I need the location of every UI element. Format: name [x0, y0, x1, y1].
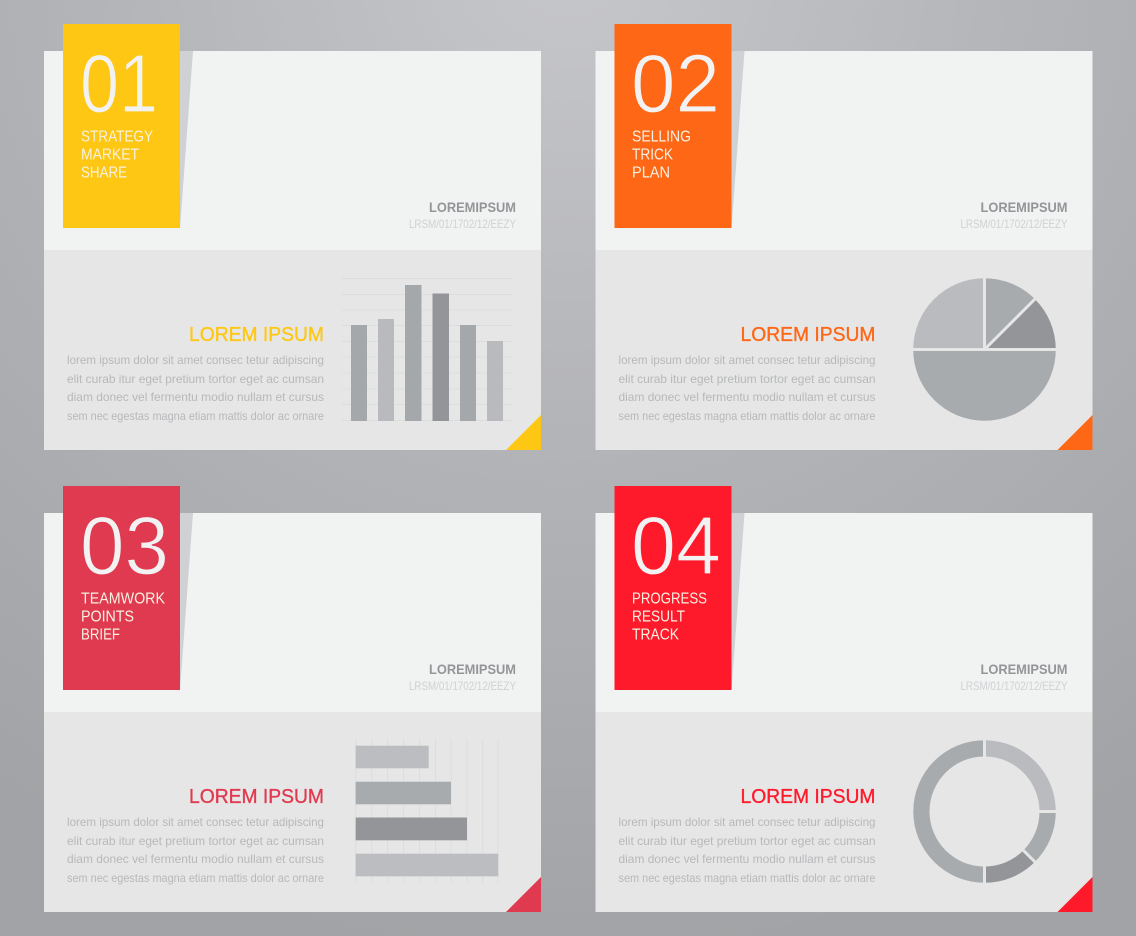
- body text: [67, 353, 324, 423]
- panel: 03 teamwork points brief: [44, 486, 541, 912]
- label shadow: [732, 513, 744, 690]
- body text: elit curab itur eget pretium tortor eget ac cumsan: [618, 834, 876, 848]
- body text: elit curab itur eget pretium tortor eget ac cumsan: [67, 834, 324, 848]
- header name: LOREMIPSUM: [980, 661, 1068, 677]
- heading: LOREM IPSUM: [189, 324, 324, 346]
- corner triangle: [1058, 415, 1092, 450]
- donut chart: [913, 738, 1059, 885]
- label text: MARKET: [81, 146, 139, 164]
- card upper area: [44, 51, 541, 250]
- number: 04: [631, 499, 721, 592]
- pie chart: [910, 276, 1059, 421]
- header name: LOREMIPSUM: [980, 199, 1068, 215]
- header name: LOREMIPSUM: [429, 199, 516, 215]
- label text: PLAN: [632, 164, 670, 182]
- label text: [81, 590, 165, 644]
- label text: RESULT: [632, 608, 685, 626]
- body text: elit curab itur eget pretium tortor eget ac cumsan: [67, 372, 324, 386]
- number: 02: [631, 37, 720, 130]
- header code: LRSM/01/1702/12/EEZY: [960, 679, 1068, 693]
- heading: LOREM IPSUM: [189, 786, 324, 808]
- panel: 04 progress result track: [596, 486, 1092, 912]
- number: 01: [80, 37, 158, 130]
- body text: sem nec egestas magna etiam mattis dolor ac ornare: [67, 871, 324, 885]
- body text: sem nec egestas magna etiam mattis dolor ac ornare: [618, 871, 876, 885]
- corner triangle: [506, 877, 541, 912]
- label text: [632, 128, 691, 182]
- card lower area: [596, 250, 1092, 450]
- panel: 01 strategy market share: [44, 24, 541, 450]
- bar chart: [342, 278, 513, 421]
- label text: TRACK: [632, 626, 679, 644]
- label shadow: [180, 513, 193, 690]
- corner triangle: [1058, 877, 1092, 912]
- label text: POINTS: [81, 608, 134, 626]
- label text: PROGRESS: [632, 590, 707, 608]
- header name: LOREMIPSUM: [429, 661, 516, 677]
- label text: STRATEGY: [81, 128, 153, 146]
- body text: elit curab itur eget pretium tortor eget ac cumsan: [618, 372, 876, 386]
- label shadow: [180, 51, 193, 228]
- body text: sem nec egestas magna etiam mattis dolor ac ornare: [618, 409, 876, 423]
- body text: lorem ipsum dolor sit amet consec tetur adipiscing: [67, 353, 324, 367]
- label tab: [63, 24, 180, 228]
- body text: diam donec vel fermentu modio nullam et cursus: [618, 852, 876, 866]
- card upper area: [44, 513, 541, 712]
- header code: LRSM/01/1702/12/EEZY: [409, 217, 516, 231]
- label text: TEAMWORK: [81, 590, 165, 608]
- heading: LOREM IPSUM: [740, 786, 876, 808]
- label text: [632, 590, 707, 644]
- header code: LRSM/01/1702/12/EEZY: [960, 217, 1068, 231]
- label text: SHARE: [81, 164, 127, 182]
- horizontal bar chart: [356, 739, 498, 883]
- body text: [618, 815, 876, 885]
- label tab: [63, 486, 180, 690]
- body text: sem nec egestas magna etiam mattis dolor ac ornare: [67, 409, 324, 423]
- number: 03: [80, 499, 169, 592]
- body text: [618, 353, 876, 423]
- label text: BRIEF: [81, 626, 120, 644]
- card upper area: [596, 513, 1092, 712]
- label text: TRICK: [632, 146, 673, 164]
- label text: [81, 128, 153, 182]
- heading: LOREM IPSUM: [740, 324, 876, 346]
- body text: [67, 815, 324, 885]
- card upper area: [596, 51, 1092, 250]
- label text: SELLING: [632, 128, 691, 146]
- card lower area: [596, 712, 1092, 912]
- body text: diam donec vel fermentu modio nullam et cursus: [618, 390, 876, 404]
- label tab: [614, 24, 732, 228]
- card lower area: [44, 712, 541, 912]
- corner triangle: [506, 415, 541, 450]
- panel: 02 selling trick plan: [596, 24, 1092, 450]
- body text: diam donec vel fermentu modio nullam et cursus: [67, 852, 324, 866]
- body text: lorem ipsum dolor sit amet consec tetur adipiscing: [618, 353, 876, 367]
- card lower area: [44, 250, 541, 450]
- body text: diam donec vel fermentu modio nullam et cursus: [67, 390, 324, 404]
- body text: lorem ipsum dolor sit amet consec tetur adipiscing: [618, 815, 876, 829]
- label tab: [614, 486, 732, 690]
- body text: lorem ipsum dolor sit amet consec tetur adipiscing: [67, 815, 324, 829]
- label shadow: [732, 51, 744, 228]
- header code: LRSM/01/1702/12/EEZY: [409, 679, 516, 693]
